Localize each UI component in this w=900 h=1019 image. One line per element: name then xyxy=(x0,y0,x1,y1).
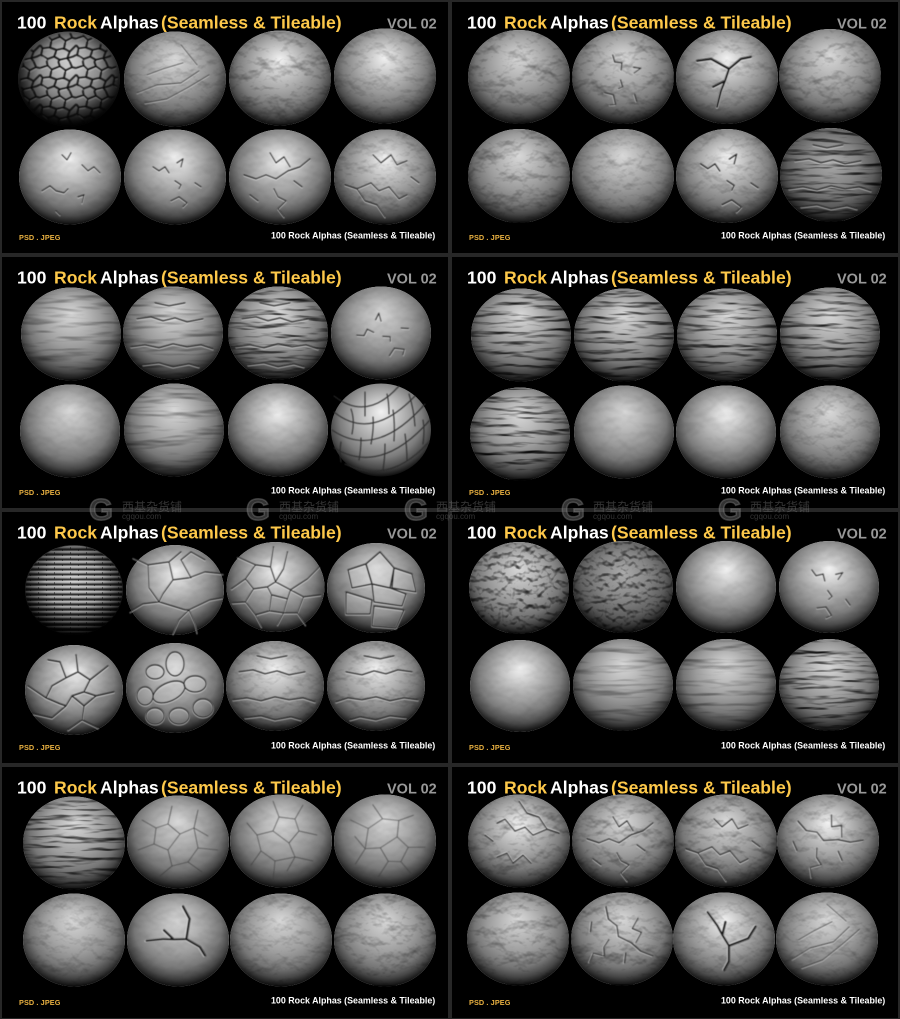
caption: 100 Rock Alphas (Seamless & Tileable) xyxy=(271,486,435,496)
panel: row 3 right xyxy=(452,512,898,763)
sphere: crack xyxy=(127,894,229,986)
sphere: patches xyxy=(334,130,436,224)
caption: 100 Rock Alphas (Seamless & Tileable) xyxy=(721,741,885,751)
sphere xyxy=(780,386,880,478)
sphere xyxy=(23,894,125,986)
watermark 2: G xyxy=(246,492,270,527)
format label: PSD . JPEG xyxy=(19,233,61,242)
sphere: rough xyxy=(334,28,436,124)
sphere xyxy=(334,894,436,986)
title: 100 xyxy=(467,268,497,288)
sphere: round cobbles xyxy=(126,643,224,733)
sphere xyxy=(471,288,571,382)
title: 100 xyxy=(17,268,47,288)
watermark 4: cgqou.com xyxy=(593,512,632,521)
title: Alphas xyxy=(100,268,159,288)
sphere xyxy=(20,384,120,478)
volume label: VOL 02 xyxy=(837,782,887,798)
title: 100 xyxy=(467,12,497,32)
caption: 100 Rock Alphas (Seamless & Tileable) xyxy=(271,996,435,1006)
sphere: stones xyxy=(18,32,120,126)
sphere: striated xyxy=(124,32,226,126)
sphere xyxy=(779,639,879,731)
sphere xyxy=(23,796,125,890)
caption: 100 Rock Alphas (Seamless & Tileable) xyxy=(271,741,435,751)
caption: 100 Rock Alphas (Seamless & Tileable) xyxy=(721,486,885,496)
volume label: VOL 02 xyxy=(837,526,887,542)
sphere: crack xyxy=(673,892,775,986)
sphere: patches xyxy=(124,130,226,224)
panel: row 4 right xyxy=(452,767,898,1018)
title: 100 xyxy=(467,778,497,798)
title: (Seamless & Tileable) xyxy=(161,778,342,798)
volume label: VOL 02 xyxy=(837,16,887,32)
watermark row xyxy=(89,492,810,527)
sphere xyxy=(676,639,776,731)
volume label: VOL 02 xyxy=(387,782,437,798)
sphere: fine cracks xyxy=(127,796,229,888)
title: (Seamless & Tileable) xyxy=(161,12,342,32)
title: (Seamless & Tileable) xyxy=(611,778,792,798)
sphere: dark strata xyxy=(780,128,882,222)
title: 100 xyxy=(17,778,47,798)
sphere xyxy=(573,639,673,731)
sphere xyxy=(780,288,880,380)
sphere: bumpy xyxy=(469,542,569,634)
sphere xyxy=(779,29,881,123)
title: Alphas xyxy=(550,522,609,542)
watermark 2: 西基杂货铺 xyxy=(279,499,339,514)
sphere: big cracks xyxy=(126,545,224,635)
sphere: patches xyxy=(229,130,331,224)
watermark 1: 西基杂货铺 xyxy=(122,499,182,514)
watermark 3: cgqou.com xyxy=(436,512,475,521)
sphere xyxy=(569,892,673,986)
watermark 1: cgqou.com xyxy=(122,512,161,521)
title: Rock xyxy=(504,522,547,542)
format label: PSD . JPEG xyxy=(469,998,511,1007)
title: Alphas xyxy=(550,778,609,798)
watermark 3: 西基杂货铺 xyxy=(436,499,496,514)
volume label: VOL 02 xyxy=(837,272,887,288)
title: (Seamless & Tileable) xyxy=(611,12,792,32)
title: Rock xyxy=(54,778,97,798)
sphere xyxy=(572,30,674,124)
format label: PSD . JPEG xyxy=(469,488,511,497)
panel: row 1 left xyxy=(2,2,448,253)
sphere xyxy=(467,892,569,986)
title: Alphas xyxy=(550,268,609,288)
format label: PSD . JPEG xyxy=(19,998,61,1007)
title: Rock xyxy=(54,522,97,542)
watermark 3: G xyxy=(404,492,428,527)
caption: 100 Rock Alphas (Seamless & Tileable) xyxy=(271,231,435,241)
watermark 5: G xyxy=(718,492,742,527)
watermark 2 xyxy=(246,492,339,527)
sphere xyxy=(124,384,224,476)
title: (Seamless & Tileable) xyxy=(161,522,342,542)
caption: 100 Rock Alphas (Seamless & Tileable) xyxy=(721,996,885,1006)
title: Alphas xyxy=(100,12,159,32)
sphere xyxy=(777,794,879,891)
caption: 100 Rock Alphas (Seamless & Tileable) xyxy=(721,231,885,241)
sphere xyxy=(228,384,328,476)
sphere xyxy=(572,129,674,223)
sphere xyxy=(468,129,570,223)
sphere xyxy=(676,129,778,223)
sphere: Y crack xyxy=(676,30,778,124)
sphere: tiles xyxy=(331,384,431,476)
title: Rock xyxy=(54,12,97,32)
title: (Seamless & Tileable) xyxy=(611,268,792,288)
sphere xyxy=(677,288,777,382)
sphere xyxy=(21,288,121,380)
sphere xyxy=(676,386,776,478)
sphere: bumpy xyxy=(573,541,673,633)
sphere xyxy=(230,894,332,986)
format label: PSD . JPEG xyxy=(469,743,511,752)
format label: PSD . JPEG xyxy=(19,488,61,497)
sphere: rough xyxy=(229,30,331,126)
format label: PSD . JPEG xyxy=(469,233,511,242)
watermark 5 xyxy=(718,492,810,527)
format label: PSD . JPEG xyxy=(19,743,61,752)
sphere xyxy=(468,30,570,124)
title: 100 xyxy=(17,12,47,32)
panel: row 3 left xyxy=(2,512,448,763)
title: Rock xyxy=(54,268,97,288)
panel: row 4 left xyxy=(2,767,448,1018)
watermark 2: cgqou.com xyxy=(279,512,318,521)
sphere: fine cracks xyxy=(230,794,332,888)
title: Alphas xyxy=(100,778,159,798)
sphere xyxy=(123,286,223,380)
watermark 4: G xyxy=(561,492,585,527)
sphere xyxy=(676,541,776,633)
sphere: bricks xyxy=(25,545,123,635)
sphere xyxy=(779,541,879,633)
watermark 5: 西基杂货铺 xyxy=(750,499,810,514)
sphere xyxy=(470,388,570,480)
watermark 4 xyxy=(561,492,653,527)
title: Alphas xyxy=(550,12,609,32)
title: Rock xyxy=(504,778,547,798)
panel: row 2 right xyxy=(452,257,898,508)
title: Rock xyxy=(504,268,547,288)
watermark 1 xyxy=(89,492,182,527)
sphere: patches xyxy=(19,130,121,224)
watermark 4: 西基杂货铺 xyxy=(593,499,653,514)
sphere: strata cracks xyxy=(327,641,425,731)
volume label: VOL 02 xyxy=(387,16,437,32)
title: (Seamless & Tileable) xyxy=(611,522,792,542)
sphere xyxy=(468,794,570,888)
sphere xyxy=(675,794,777,888)
watermark 1: G xyxy=(89,492,113,527)
watermark 3 xyxy=(404,492,496,527)
title: Rock xyxy=(504,12,547,32)
sphere: dense cracks xyxy=(226,542,324,632)
sphere xyxy=(470,640,570,732)
sphere: diagonal grain xyxy=(776,892,878,986)
sphere: strata cracks xyxy=(226,641,324,731)
panel: row 2 left xyxy=(2,257,448,508)
sphere: crack net xyxy=(25,645,123,735)
sphere: cobbles xyxy=(327,543,425,633)
title: (Seamless & Tileable) xyxy=(161,268,342,288)
sphere xyxy=(574,288,674,382)
watermark 5: cgqou.com xyxy=(750,512,789,521)
sphere xyxy=(331,286,431,380)
sphere: fine cracks xyxy=(334,794,436,889)
sphere xyxy=(572,794,674,888)
title: 100 xyxy=(17,522,47,542)
panel: row 1 right xyxy=(452,2,898,253)
title: 100 xyxy=(467,522,497,542)
volume label: VOL 02 xyxy=(387,526,437,542)
sphere xyxy=(574,386,674,478)
volume label: VOL 02 xyxy=(387,272,437,288)
title: Alphas xyxy=(100,522,159,542)
sphere xyxy=(228,286,328,380)
